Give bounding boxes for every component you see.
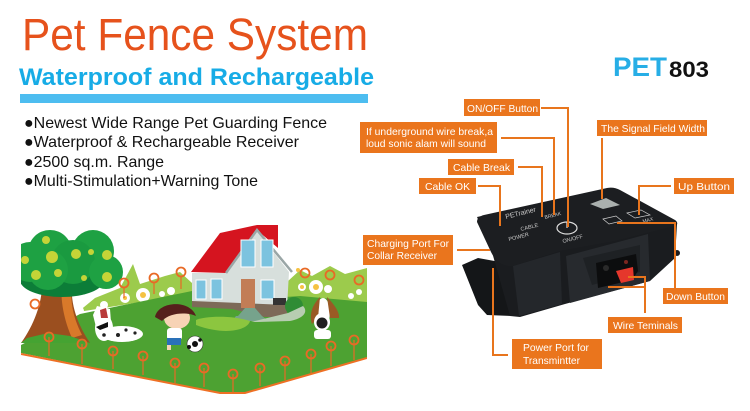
- fence posts with paw markers: [30, 268, 364, 393]
- panel print: CABLE: [520, 223, 539, 233]
- feature list: ●Multi-Stimulation+Warning Tone: [24, 173, 258, 190]
- label: up button: [674, 178, 734, 194]
- label: wire break alarm: If underground wire break,a: [366, 126, 493, 138]
- leader lines: [457, 108, 675, 355]
- model number: PET: [613, 52, 668, 82]
- feature list: ●2500 sq.m. Range: [24, 154, 164, 171]
- power button icon: [557, 222, 577, 234]
- label: power port: [512, 339, 602, 369]
- label: ON/OFF button: ON/OFF Button: [467, 103, 538, 115]
- label: cable OK: [419, 178, 476, 194]
- house: [191, 225, 305, 331]
- label: cable break: [448, 159, 514, 175]
- device top face: [477, 188, 677, 266]
- label: ON/OFF button: [464, 99, 540, 116]
- label: cable OK: Cable OK: [425, 181, 470, 193]
- up and down buttons: [603, 210, 650, 224]
- beagle dog: [311, 297, 339, 339]
- dalmatian dog: [93, 306, 143, 342]
- blue divider bar: [20, 94, 368, 103]
- lawn: [21, 291, 367, 393]
- panel print: POWER: [508, 232, 530, 243]
- label: wire break alarm: [360, 122, 497, 153]
- transmitter device: [462, 188, 680, 317]
- label: power port: Transmintter: [523, 355, 580, 367]
- model number: 803: [669, 57, 709, 82]
- label: charging port: Collar Receiver: [367, 250, 437, 262]
- subtitle: Waterproof and Rechargeable: [19, 64, 374, 91]
- label: charging port: [363, 235, 453, 265]
- terminal block: [583, 245, 640, 288]
- boy with football: [155, 304, 203, 352]
- label: down button: Down Button: [666, 291, 725, 303]
- label: cable break: Cable Break: [453, 162, 511, 174]
- label: wire terminals: [608, 317, 682, 333]
- garden scene illustration: [10, 225, 367, 393]
- front side panels: [513, 252, 562, 316]
- label: wire terminals: Wire Teminals: [613, 320, 678, 332]
- label: power port: Power Port for: [523, 342, 589, 354]
- label: charging port: Charging Port For: [367, 238, 449, 250]
- panel print: BREAK: [544, 211, 563, 221]
- label: wire break alarm: loud sonic alam will sound: [366, 138, 486, 150]
- label: signal field width: The Signal Field Width: [601, 123, 705, 135]
- mounting flange: [462, 258, 512, 316]
- panel print: ON/OFF: [562, 234, 584, 245]
- label: up button: Up Button: [678, 181, 730, 193]
- signal display window: [590, 198, 620, 209]
- flower hedge: [83, 264, 367, 311]
- orange fence line: [21, 354, 367, 393]
- title: Pet Fence System: [22, 9, 368, 60]
- feature list: [24, 115, 327, 190]
- label: down button: [663, 288, 728, 304]
- device body: [477, 188, 677, 317]
- feature list: ●Waterproof & Rechargeable Receiver: [24, 134, 300, 151]
- panel print: [505, 206, 655, 245]
- feature list: ●Newest Wide Range Pet Guarding Fence: [24, 115, 327, 132]
- panel print: MAX: [642, 216, 655, 225]
- side screw: [674, 250, 680, 256]
- panel print: PETrainer: [505, 206, 537, 221]
- model number: [613, 52, 709, 82]
- tree: [10, 230, 123, 343]
- labels: [360, 99, 734, 369]
